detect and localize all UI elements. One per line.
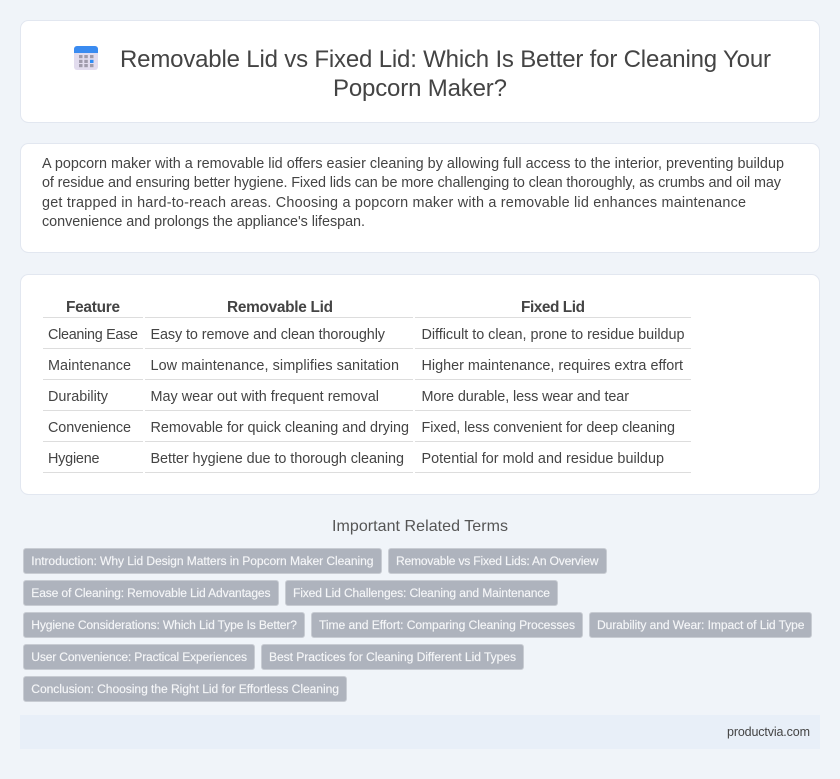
tag list	[24, 548, 812, 702]
table header row: Fixed Lid	[521, 299, 585, 316]
tag: User Convenience: Practical Experiences	[31, 650, 247, 664]
title: Removable Lid vs Fixed Lid: Which Is Better for Cleaning Your	[120, 46, 771, 73]
panel: title header	[20, 20, 820, 122]
row: convenience: Removable for quick cleaning and drying	[150, 420, 409, 436]
row: maintenance: Maintenance	[48, 358, 131, 374]
tag: Introduction: Why Lid Design Matters in Popcorn Maker Cleaning	[31, 554, 374, 568]
row: durability: Durability	[48, 389, 109, 405]
title	[120, 46, 771, 102]
tag	[24, 644, 254, 670]
tag	[24, 676, 346, 702]
tag	[388, 548, 606, 574]
tag: Conclusion: Choosing the Right Lid for Effortless Cleaning	[31, 682, 339, 696]
row: hygiene: Better hygiene due to thorough cleaning	[150, 451, 404, 467]
table header row: Removable Lid	[227, 299, 333, 316]
row: durability	[48, 389, 629, 405]
row: hygiene	[48, 451, 664, 467]
tag	[24, 548, 382, 574]
tag: Best Practices for Cleaning Different Lid Types	[269, 650, 516, 664]
panel: summary paragraph	[20, 144, 820, 252]
row: maintenance: Higher maintenance, requires extra effort	[422, 358, 683, 374]
tag	[24, 580, 278, 606]
footer	[20, 715, 820, 749]
row: cleaning ease: Cleaning Ease	[48, 327, 138, 343]
tag: Fixed Lid Challenges: Cleaning and Maintenance	[293, 586, 550, 600]
row: durability: More durable, less wear and tear	[422, 389, 629, 405]
row: convenience: Fixed, less convenient for deep cleaning	[422, 420, 675, 436]
table header row: Feature	[66, 299, 120, 316]
row: maintenance	[48, 358, 683, 374]
tag	[286, 580, 558, 606]
tag: Durability and Wear: Impact of Lid Type	[597, 618, 805, 632]
panel: summary paragraph: of residue and ensuring better hygiene. Fixed lids can be more challenging to clean thoroughly, as crumbs and oil may	[42, 175, 782, 191]
tag: Removable vs Fixed Lids: An Overview	[396, 554, 599, 568]
tag: Time and Effort: Comparing Cleaning Processes	[319, 618, 575, 632]
tag	[262, 644, 524, 670]
row: durability: May wear out with frequent removal	[150, 389, 379, 405]
row: cleaning ease: Easy to remove and clean thoroughly	[150, 327, 386, 343]
row: cleaning ease: Difficult to clean, prone to residue buildup	[422, 327, 684, 343]
tag: Ease of Cleaning: Removable Lid Advantages	[31, 586, 270, 600]
tag: Hygiene Considerations: Which Lid Type Is Better?	[31, 618, 297, 632]
table header row	[66, 299, 585, 316]
tag	[312, 612, 582, 638]
heading: important related terms: Important Related Terms	[332, 518, 508, 535]
panel: summary paragraph: convenience and prolongs the appliance's lifespan.	[42, 214, 365, 230]
row: hygiene: Potential for mold and residue buildup	[422, 451, 664, 467]
icon: calendar	[74, 46, 98, 70]
title: Popcorn Maker?	[333, 75, 507, 102]
row: hygiene: Hygiene	[48, 451, 100, 467]
row: cleaning ease	[48, 327, 684, 343]
tag	[590, 612, 812, 638]
row: maintenance: Low maintenance, simplifies sanitation	[150, 358, 399, 374]
row: convenience: Convenience	[48, 420, 131, 436]
panel: summary paragraph: get trapped in hard-to-reach areas. Choosing a popcorn maker with a removable lid enhances maintenance	[42, 195, 746, 211]
panel: summary paragraph: A popcorn maker with a removable lid offers easier cleaning by allowing full access to the interior, preventing buildup	[42, 156, 784, 172]
tag	[24, 612, 304, 638]
footer: productvia.com	[727, 725, 810, 739]
panel: comparison table	[20, 274, 820, 494]
row: convenience	[48, 420, 675, 436]
